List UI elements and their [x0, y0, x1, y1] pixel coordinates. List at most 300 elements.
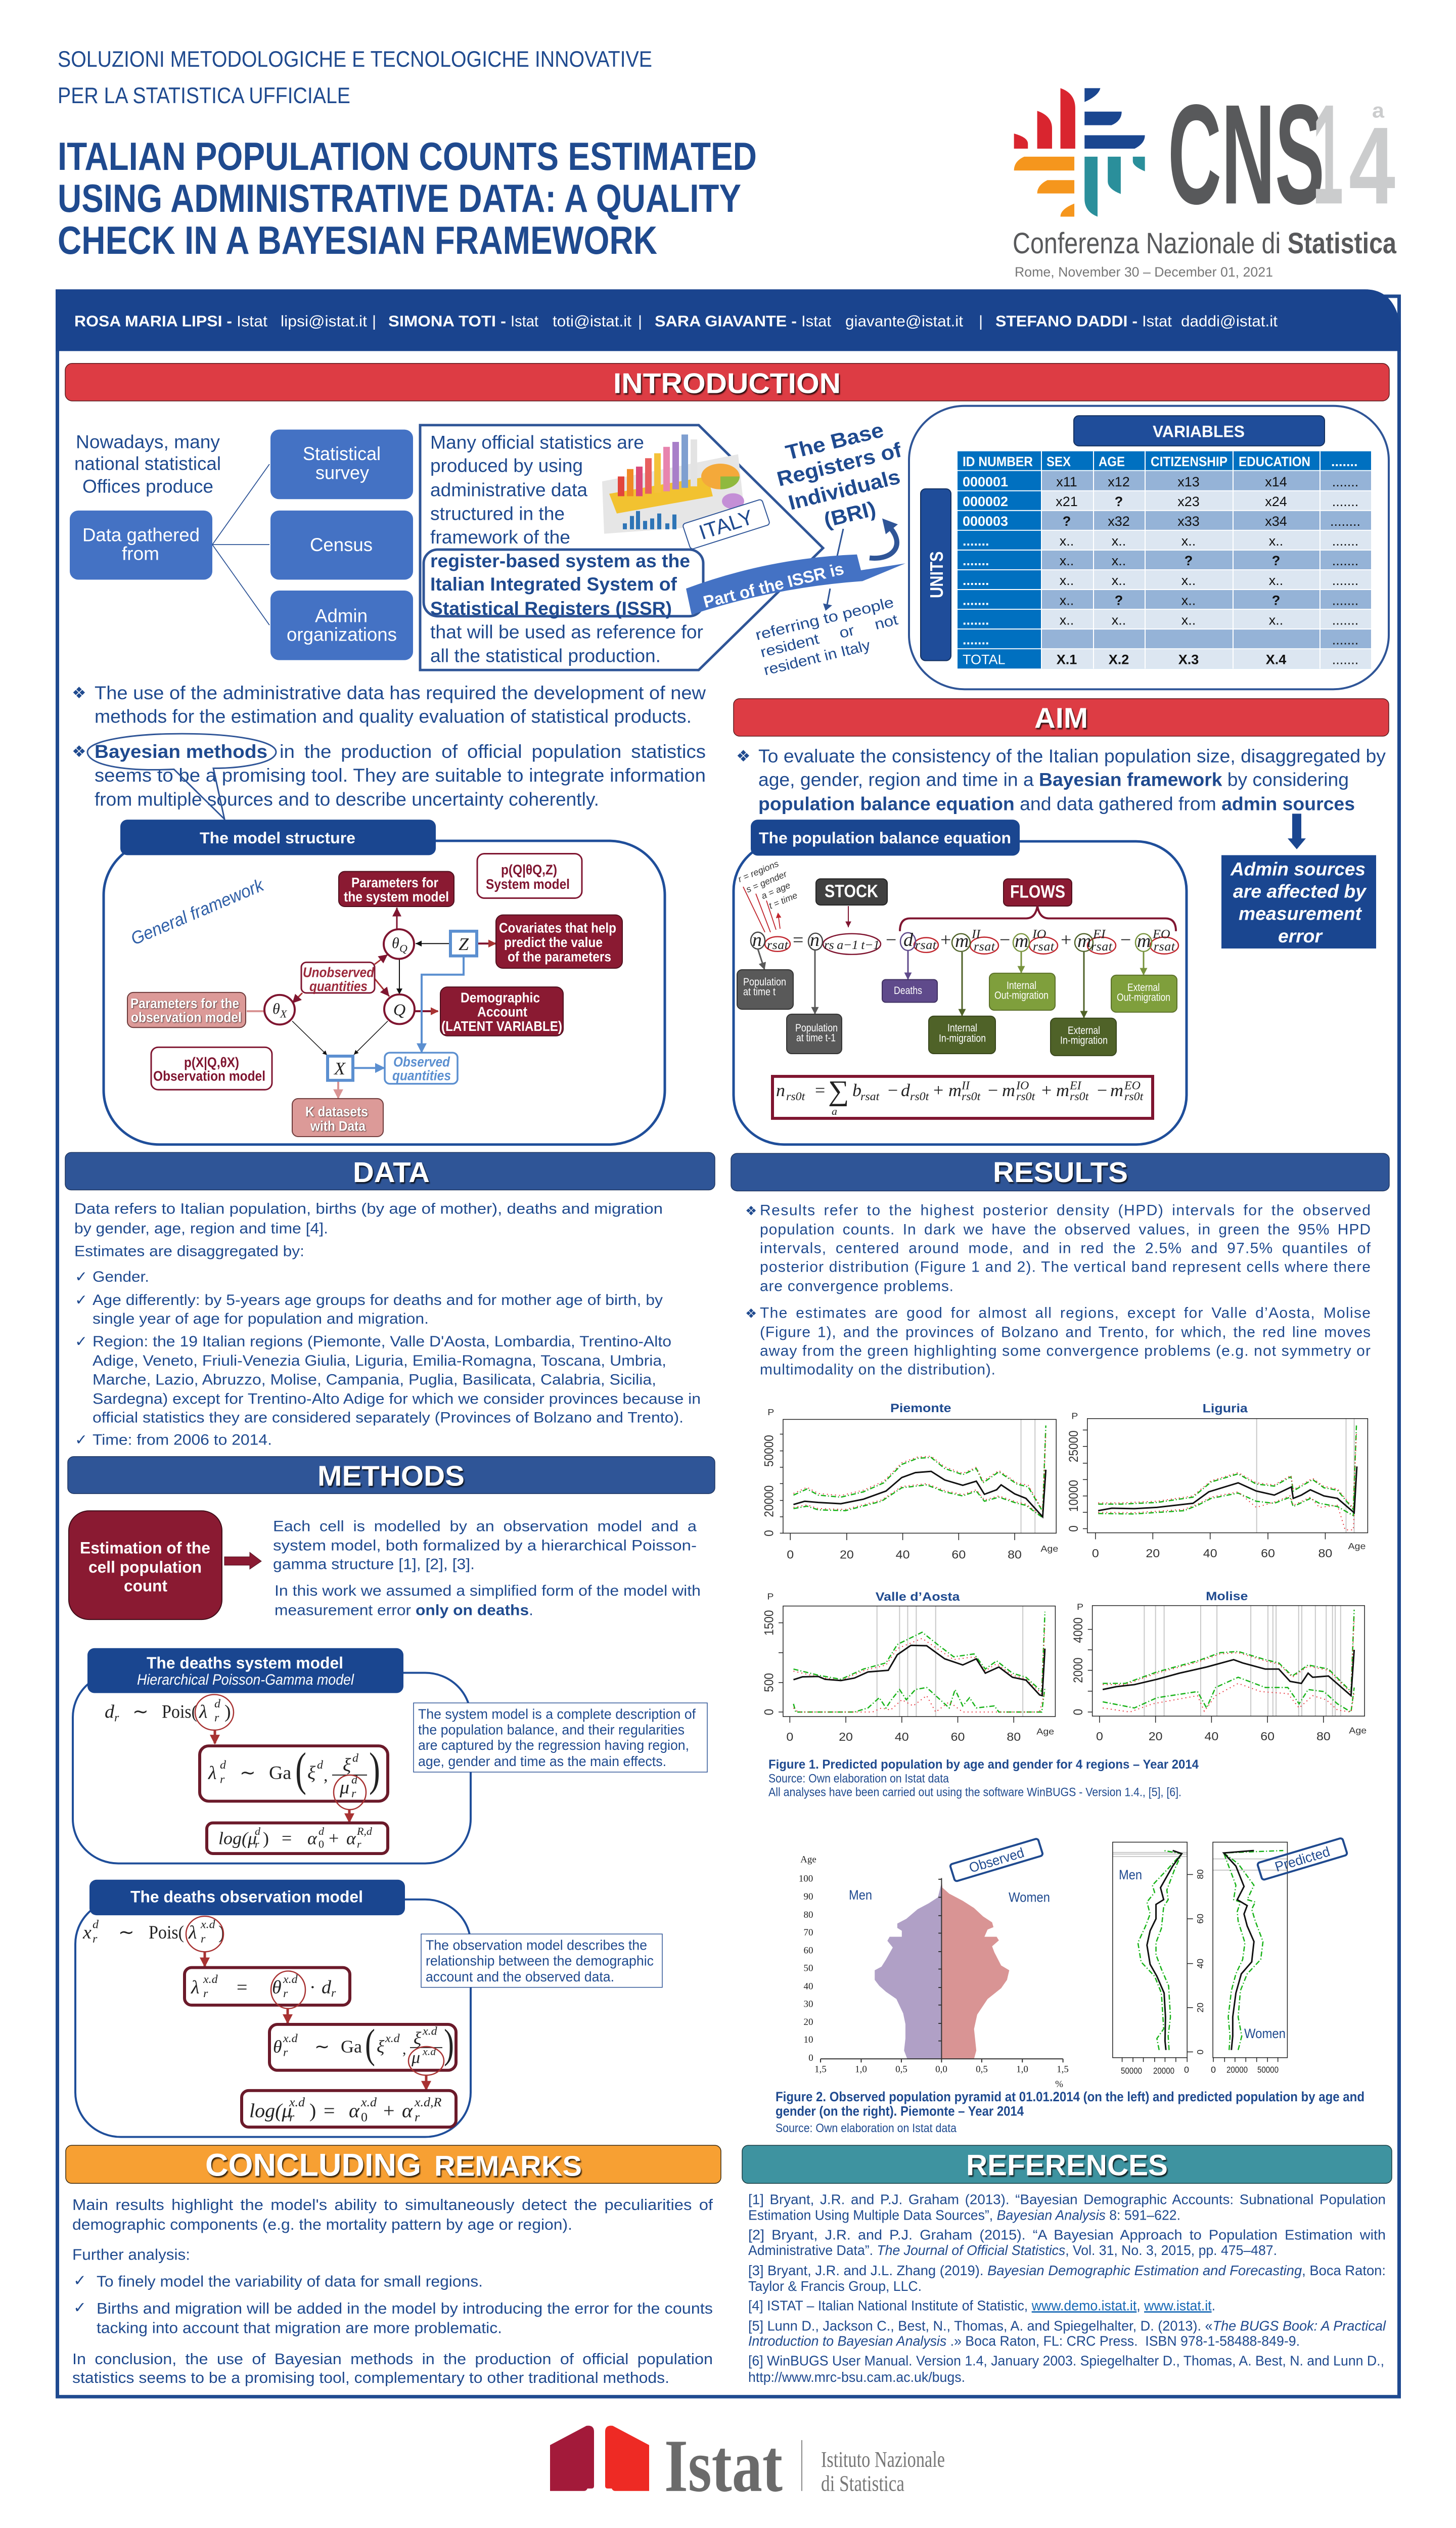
data table: X.2	[1109, 652, 1129, 667]
text: methods explanation: gamma structure [1], [2], [3].	[273, 1556, 475, 1572]
note: system model description: The system model is a complete description of	[418, 1706, 696, 1722]
formula: Poisson likelihood	[105, 1695, 234, 1743]
formula box: theta gamma prior: r	[283, 2046, 288, 2059]
data table: .......	[1332, 652, 1358, 667]
subtitle: conference session	[58, 46, 652, 108]
box: internal in-migration	[929, 1016, 995, 1054]
data table: .......	[1332, 533, 1358, 549]
chart: predicted population Piemonte: Piemonte	[890, 1402, 951, 1415]
formula box: gamma prior: λ	[208, 1763, 216, 1783]
node: unobserved quantities: quantities	[309, 978, 368, 994]
bullets: administrative data and Bayesian methods: ❖	[72, 743, 86, 761]
chart: predicted population Piemonte: 0	[762, 1530, 777, 1537]
text: results description	[745, 1202, 1371, 1378]
data table: ?	[1115, 593, 1123, 608]
equation box: aggregated balance: rs0t	[1016, 1090, 1036, 1103]
data table: x..	[1060, 573, 1074, 588]
arrow: banner to referring text	[823, 589, 832, 611]
chart: predicted population by age, men and women: Women	[1244, 2026, 1286, 2041]
formula box: lambda equals theta times d: r	[283, 1987, 288, 2000]
formula box: lambda equals theta times d: x.d	[283, 1973, 298, 1986]
callout: admin sources measurement error: are affected by	[1233, 881, 1367, 901]
text: references list: Introduction to Bayesian Analysis .» Boca Raton, FL: CRC Press. ISBN 978-1-58488-849-9.	[748, 2333, 1300, 2349]
chart: observed population pyramid: 100	[799, 1874, 813, 1884]
author band: |	[372, 313, 376, 330]
node: Z	[450, 931, 477, 956]
data table: x..	[1269, 533, 1283, 549]
chart: predicted population Molise: 4000	[1071, 1617, 1085, 1643]
text: official statistics description: Italian Integrated System of	[430, 573, 677, 595]
logo: CNS 14a Conferenza Nazionale di Statistica	[1013, 75, 1397, 280]
box: external out-migration: External	[1127, 981, 1160, 994]
text: concluding remarks: To finely model the variability of data for small regions.	[97, 2273, 483, 2290]
chart: predicted population Piemonte: P	[767, 1407, 774, 1417]
formula box: theta gamma prior: ξ	[414, 2028, 422, 2048]
box: estimation of the cell population count: count	[124, 1576, 167, 1595]
chart: observed population pyramid: Women	[1009, 1890, 1050, 1905]
box: internal out-migration: Internal	[1007, 979, 1036, 991]
equation: balance identity: IO	[1032, 927, 1046, 941]
box: population at time t-1: Population	[795, 1021, 838, 1034]
formula box: lambda equals theta times d: ·	[309, 1977, 321, 1998]
text: methods explanation: In this work we assumed a simplified form of the model with	[275, 1583, 701, 1599]
formula: Poisson likelihood: )	[224, 1702, 231, 1722]
chart: predicted population Molise: 60	[1260, 1730, 1275, 1743]
bullets: administrative data and Bayesian methods: Bayesian methods	[95, 741, 267, 762]
chart: predicted population Piemonte: 60	[951, 1549, 966, 1561]
text: data description	[74, 1201, 701, 1448]
rounded highlight: register-based system	[424, 550, 703, 616]
formula box: theta gamma prior: ξ	[377, 2037, 385, 2056]
box: internal out-migration	[989, 973, 1055, 1010]
text: nowadays	[74, 431, 221, 497]
equation: balance identity: II	[971, 927, 981, 941]
node: unobserved quantities: Unobserved	[303, 965, 375, 980]
formula box: log link: d	[318, 1825, 324, 1837]
label: units	[921, 489, 951, 661]
chart: predicted population Valle d'Aosta: 0	[786, 1731, 793, 1744]
node: theta X: X	[280, 1008, 287, 1020]
text: concluding remarks: Births and migration will be added in the model by introducing the error for the counts	[97, 2300, 713, 2317]
node: observed quantities: Observed	[393, 1054, 450, 1069]
formula: observation Poisson: x	[82, 1922, 92, 1943]
text: concluding remarks: demographic components (e.g. the mortality pattern by age or region).	[72, 2216, 572, 2233]
heading: introduction: INTRODUCTION	[613, 368, 841, 399]
formula box: gamma prior: ξ	[343, 1755, 351, 1776]
formula box: observation log link: r	[289, 2110, 295, 2124]
data table: x33	[1177, 514, 1200, 529]
formula box: log link: +	[329, 1828, 339, 1848]
text: concluding remarks: tacking into account that migration are more problematic.	[97, 2320, 502, 2336]
callout: ITALY tag: ITALY	[696, 505, 756, 544]
text: references list: http://www.mrc-bsu.cam.ac.uk/bugs.	[748, 2369, 965, 2385]
text: data description: Sardegna) except for Trentino-Alto Adige for which we consider provinces because in	[93, 1391, 701, 1407]
label: variables: VARIABLES	[1153, 422, 1245, 440]
node: theta X: θ	[272, 1001, 280, 1017]
formula: Poisson likelihood: λ	[199, 1702, 207, 1722]
text: official statistics description: framework of the	[430, 527, 570, 548]
chart: predicted population Liguria: Liguria	[1203, 1402, 1248, 1415]
panel: deaths observation model	[75, 1880, 471, 2137]
box: data gathered from: Data gathered	[82, 524, 200, 545]
formula box: observation log link: 0	[361, 2110, 368, 2124]
chart: observed population pyramid: 1,5	[1057, 2064, 1069, 2075]
node: covariates: of the parameters	[508, 949, 611, 964]
data table: ID NUMBER	[963, 454, 1033, 469]
formula box: log link: α	[346, 1828, 356, 1848]
equation box: aggregated balance	[772, 1075, 1153, 1118]
data table: .......	[963, 573, 989, 588]
formula box: gamma prior: )	[369, 1742, 380, 1795]
logo: Istat: Istat	[664, 2424, 783, 2507]
data table: ?	[1272, 553, 1280, 568]
node: parameters for observation model: observation model	[131, 1010, 242, 1025]
chart: predicted population Molise: Molise	[1206, 1590, 1248, 1603]
chart: observed population pyramid	[799, 1855, 1069, 2090]
box: estimation of the cell population count: Estimation of the	[80, 1539, 210, 1557]
author band: giavante@istat.it	[845, 313, 963, 330]
chart: predicted population by age, men and women: 20000	[1153, 2066, 1174, 2076]
text: official statistics description: all the statistical production.	[430, 645, 661, 666]
header: the model structure	[120, 820, 436, 855]
chart: predicted population by age, men and women: 0	[1195, 2050, 1205, 2054]
text: data description: Age differently: by 5-years age groups for deaths and for mother age of birth, by	[93, 1292, 663, 1308]
equation: balance identity: +	[940, 930, 951, 951]
heading: concluding remarks	[66, 2145, 721, 2183]
chart: predicted population Valle d'Aosta	[762, 1590, 1055, 1744]
formula: observation Poisson: d	[93, 1918, 99, 1931]
heading: concluding remarks: REMARKS	[434, 2150, 582, 2183]
node: demographic account: Account	[477, 1004, 527, 1020]
text: aim statement: population balance equation and data gathered from admin sources	[758, 793, 1355, 814]
logo: CNS 14a Conferenza Nazionale di Statistica: a	[1372, 99, 1385, 122]
chart: observed population pyramid: 70	[804, 1927, 813, 1938]
note: system model description: age, gender and time as the main effects.	[418, 1753, 666, 1769]
data table: ?	[1272, 593, 1280, 608]
bullets: administrative data and Bayesian methods: seems to be a promising tool. They are suitable to integrate information	[95, 764, 706, 786]
label: stock: STOCK	[825, 881, 878, 901]
heading text: the base registers of individuals: Registers of	[775, 438, 904, 491]
formula: Poisson likelihood: r	[214, 1711, 219, 1724]
box: census: Census	[310, 534, 373, 555]
formula box: gamma prior: d	[220, 1758, 226, 1772]
text: data description: ✓	[75, 1268, 87, 1285]
node: system model formula	[477, 853, 582, 898]
chart: predicted population Molise: P	[1077, 1602, 1083, 1612]
node: theta Q: Q	[399, 942, 407, 955]
chart: observed population pyramid: 0,5	[976, 2064, 988, 2075]
author band: lipsi@istat.it	[281, 313, 368, 330]
formula: observation Poisson: r	[93, 1932, 98, 1946]
equation: balance identity: EO	[1152, 927, 1170, 941]
heading: aim	[734, 699, 1389, 736]
text: concluding remarks: ✓	[73, 2272, 86, 2289]
data table: x..	[1112, 573, 1126, 588]
text: references list: Estimation Using Multiple Data Sources”, Bayesian Analysis 8: 591–622.	[748, 2207, 1180, 2223]
panel: the model structure	[104, 820, 665, 1145]
author band: STEFANO DADDI -	[995, 313, 1138, 330]
text: data description: ✓	[75, 1291, 87, 1308]
formula box: observation log link: x.d	[289, 2095, 305, 2109]
formula box: observation log link	[242, 2091, 456, 2127]
formula box: observation log link: r	[415, 2110, 420, 2124]
formula box: gamma prior: r	[351, 1787, 356, 1800]
text: results description: (Figure 1), and the provinces of Bolzano and Trento, for which, the red line moves	[760, 1324, 1371, 1340]
data table: TOTAL	[963, 652, 1005, 667]
equation box: aggregated balance: rs0t	[786, 1090, 806, 1103]
chart: predicted population by age, men and women: 20000	[1226, 2065, 1248, 2075]
data table: CITIZENSHIP	[1151, 454, 1227, 469]
node: covariates: predict the value	[504, 934, 603, 950]
equation: balance identity: −	[886, 930, 896, 951]
equation box: aggregated balance: +	[1041, 1080, 1052, 1100]
callout: observed tag	[950, 1838, 1043, 1882]
data table: .......	[963, 593, 989, 608]
formula: Poisson likelihood: d	[105, 1702, 114, 1722]
author band: Istat	[801, 313, 831, 330]
heading text: the base registers of individuals: (BRI)	[822, 496, 878, 532]
formula box: gamma prior: ∼	[240, 1763, 256, 1783]
logo: CNS 14a Conferenza Nazionale di Statistica: Conferenza Nazionale di Statistica	[1013, 227, 1397, 260]
chart: predicted population Liguria: 40	[1203, 1547, 1217, 1560]
formula box: theta gamma prior: Ga	[341, 2037, 362, 2056]
arrow: estimation to explanation	[224, 1552, 261, 1569]
callout: predicted tag: Predicted	[1273, 1843, 1332, 1875]
poster frame	[58, 296, 1399, 2397]
text: referring to people: referring to people	[754, 594, 895, 644]
formula box: theta gamma prior: (	[365, 2020, 375, 2066]
header: deaths observation model: The deaths observation model	[130, 1887, 363, 1906]
text: results description: away from the green highlighting some convergence problems (e.g. not symmetry or	[760, 1343, 1371, 1360]
chart: predicted population Valle d'Aosta: Age	[1036, 1727, 1054, 1736]
text: concluding remarks: Main results highlight the model's ability to simultaneously detect the peculiarities of	[72, 2196, 713, 2214]
equation: balance identity: d	[903, 930, 913, 951]
formula box: theta gamma prior	[269, 2020, 456, 2090]
chart: predicted population Valle d'Aosta: 500	[762, 1673, 777, 1692]
logo: CNS 14a Conferenza Nazionale di Statistica: 1	[1312, 75, 1343, 234]
data table: x11	[1056, 474, 1077, 489]
caption: figure 1: Source: Own elaboration on Istat data	[768, 1772, 949, 1785]
text: concluding remarks: Further analysis:	[72, 2246, 190, 2264]
data table: x23	[1177, 494, 1200, 509]
header: the model structure: The model structure	[200, 829, 355, 847]
chart: observed population pyramid: 1,5	[814, 2064, 827, 2075]
formula box: log link: d	[255, 1825, 260, 1837]
formula box: gamma prior: d	[352, 1752, 358, 1765]
formula box: observation log link: =	[324, 2100, 335, 2121]
equation: balance identity: rsat	[1154, 939, 1175, 954]
chart: predicted population Piemonte: 80	[1008, 1549, 1022, 1561]
formula box: lambda equals theta times d: x.d	[203, 1973, 218, 1986]
equation box: aggregated balance: rs0t	[1124, 1090, 1144, 1103]
arrow: admin sources	[1288, 814, 1306, 849]
node: observation model formula	[151, 1047, 272, 1090]
bullets: administrative data and Bayesian methods: ❖	[72, 684, 86, 702]
formula box: gamma prior: r	[220, 1773, 225, 1786]
node: X	[328, 1056, 353, 1080]
panel: deaths system model	[73, 1648, 471, 1864]
data table: .......	[1332, 474, 1358, 489]
formula box: log link: r	[255, 1838, 259, 1850]
node: Q	[384, 995, 415, 1024]
text: references list: Taylor & Francis Group, LLC.	[748, 2279, 922, 2294]
author band: toti@istat.it	[553, 313, 631, 330]
heading: concluding remarks: CONCLUDING	[205, 2147, 421, 2183]
data table: x13	[1177, 474, 1200, 489]
chart: predicted population Valle d'Aosta: 60	[951, 1731, 965, 1744]
box: admin organizations: organizations	[287, 624, 397, 645]
box: estimation of the cell population count	[69, 1511, 222, 1619]
connector lines: data sources	[212, 464, 269, 625]
author band: ROSA MARIA LIPSI -	[74, 313, 232, 330]
data table: .......	[1332, 573, 1358, 588]
formula box: gamma prior: (	[295, 1742, 306, 1795]
text: results description: ❖	[745, 1306, 757, 1321]
equation box: aggregated balance: n	[776, 1080, 785, 1100]
text: data description: by gender, age, region and time [4].	[74, 1221, 328, 1237]
callout: predicted tag	[1257, 1838, 1347, 1880]
data table: x32	[1108, 514, 1130, 529]
equation box: aggregated balance: rsat	[860, 1090, 880, 1103]
data table: x14	[1265, 474, 1287, 489]
chart: predicted population Liguria	[1067, 1402, 1368, 1560]
arrows: equation terms to boxes	[758, 949, 1144, 1018]
chart: observed population pyramid: 30	[804, 1999, 813, 2010]
node: Z: Z	[459, 934, 469, 954]
node: observation model formula: Observation model	[153, 1068, 265, 1084]
author band: |	[979, 313, 983, 330]
equation: balance identity: EI	[1093, 927, 1106, 941]
logo: Istat: Istituto Nazionale	[821, 2446, 945, 2472]
formula box: lambda equals theta times d: r	[331, 1987, 336, 2000]
data table: x..	[1060, 533, 1074, 549]
chart: predicted population Molise: 2000	[1071, 1657, 1085, 1683]
text: results description: multimodality on the distribution).	[760, 1362, 995, 1378]
data table: 000003	[963, 514, 1008, 529]
box: statistical survey	[270, 430, 413, 499]
chart: predicted population Molise: 40	[1204, 1730, 1218, 1743]
data table: x34	[1265, 514, 1287, 529]
chart: predicted population Liguria: Age	[1348, 1541, 1366, 1551]
node: demographic account: Demographic	[461, 990, 540, 1005]
chart: observed population pyramid: 90	[804, 1891, 813, 1902]
chart: predicted population Liguria: 25000	[1067, 1430, 1081, 1462]
text: references list: [4] ISTAT – Italian National Institute of Statistic, www.demo.istat.it, www.istat.it.	[748, 2298, 1215, 2313]
formula: Poisson likelihood: Pois(	[162, 1702, 197, 1722]
heading: methods	[68, 1457, 715, 1494]
equation box: aggregated balance: a	[832, 1105, 837, 1117]
data table: x..	[1269, 613, 1283, 627]
panel: variables and units table	[65, 406, 1392, 2507]
box: census	[270, 511, 413, 579]
formula box: theta gamma prior: μ	[411, 2048, 420, 2067]
equation: balance identity: m	[1077, 931, 1091, 952]
text: results description: are convergence problems.	[760, 1278, 953, 1295]
chart: predicted population by age, men and women: 40	[1195, 1959, 1205, 1969]
data table	[958, 452, 1371, 668]
logo: CNS 14a Conferenza Nazionale di Statistica: Rome, November 30 – December 01, 2021	[1015, 264, 1273, 280]
equation: balance identity: m	[1137, 931, 1151, 952]
data table: X.3	[1178, 652, 1199, 667]
text: nowadays: Nowadays, many	[76, 431, 220, 453]
node: observed quantities	[385, 1053, 458, 1084]
data table: x..	[1181, 533, 1196, 549]
chart: observed population pyramid: %	[1055, 2079, 1063, 2090]
formula box: gamma prior: d	[317, 1758, 323, 1772]
bullets: administrative data and Bayesian methods: methods for the estimation and quality evaluation of statistical products.	[95, 706, 692, 727]
header: population balance equation: The population balance equation	[759, 829, 1011, 847]
node: covariates: Covariates that help	[499, 920, 616, 936]
note: observation model description: account and the observed data.	[426, 1969, 614, 1984]
bullets: administrative data and Bayesian methods: from multiple sources and to describe uncertainty coherently.	[95, 789, 599, 810]
text: concluding remarks	[72, 2196, 713, 2386]
text: references list: Administrative Data”. The Journal of Official Statistics, Vol. 31, No. 3, 2015, pp. 475–487.	[748, 2242, 1277, 2258]
arrow: BRI to part of ISSR banner	[837, 529, 843, 556]
box: external in-migration: External	[1068, 1024, 1100, 1036]
formula box: log link: r	[357, 1838, 361, 1850]
text: official statistics description: produced by using	[430, 455, 583, 476]
formula box: log link: α	[307, 1828, 317, 1848]
author band	[56, 289, 1401, 351]
data table: x..	[1181, 613, 1196, 627]
chart: predicted population by age, men and women: 50000	[1121, 2066, 1142, 2076]
label: flows	[1004, 879, 1072, 906]
caption: figure 2	[776, 2090, 1364, 2135]
text: methods explanation	[273, 1518, 701, 1618]
data table: .......	[963, 633, 989, 647]
title	[58, 134, 757, 262]
equation box: aggregated balance: II	[961, 1079, 970, 1092]
data table: .......	[963, 613, 989, 627]
data table: AGE	[1099, 454, 1125, 469]
data table: x..	[1181, 573, 1196, 588]
caption: figure 2: gender (on the right). Piemonte – Year 2014	[776, 2104, 1024, 2118]
chart: predicted population Valle d'Aosta: P	[767, 1591, 774, 1601]
data table: ?	[1115, 494, 1123, 509]
legend: index meanings: a = age	[760, 880, 792, 901]
data table: ?	[1063, 514, 1071, 529]
text: nowadays: Offices produce	[82, 476, 213, 497]
formula: Poisson likelihood: ∼	[132, 1702, 149, 1722]
chart: predicted population Piemonte: 50000	[762, 1435, 777, 1467]
text: official statistics description	[430, 432, 703, 666]
text: results description: population counts. In dark we have the observed values, in green the 95% HPD	[760, 1222, 1371, 1238]
box: statistical survey: Statistical	[303, 443, 381, 464]
data table: x12	[1108, 474, 1130, 489]
formula: observation Poisson: )	[218, 1922, 225, 1943]
box: internal out-migration: Out-migration	[994, 989, 1049, 1002]
node: system model formula: p(Q|θQ,Z)	[501, 862, 557, 877]
equation box: aggregated balance: rs0t	[962, 1090, 981, 1103]
chart: predicted population Liguria: 0	[1092, 1547, 1099, 1560]
node: Q: Q	[393, 1001, 405, 1019]
equation box: aggregated balance: EI	[1069, 1079, 1082, 1092]
header: deaths observation model	[89, 1880, 405, 1915]
box: population at time t	[737, 970, 793, 1009]
label: flows: FLOWS	[1010, 882, 1065, 901]
equation: balance identity: rsat	[1091, 939, 1113, 954]
text: concluding remarks: In conclusion, the use of Bayesian methods in the production of official population	[72, 2351, 713, 2368]
text: data description: ✓	[75, 1332, 87, 1350]
bullets: administrative data and Bayesian methods: in the production of official population statistics	[280, 741, 706, 762]
node: K datasets: K datasets	[305, 1104, 368, 1119]
box: external in-migration: In-migration	[1060, 1034, 1108, 1046]
text: data description: Data refers to Italian population, births (by age of mother), deaths and migration	[74, 1201, 663, 1217]
formula box: theta gamma prior: ∼	[314, 2037, 330, 2056]
text: data description: Estimates are disaggregated by:	[74, 1243, 304, 1259]
chart: predicted population Liguria: 0	[1067, 1525, 1081, 1532]
box: internal in-migration: Internal	[947, 1021, 977, 1034]
